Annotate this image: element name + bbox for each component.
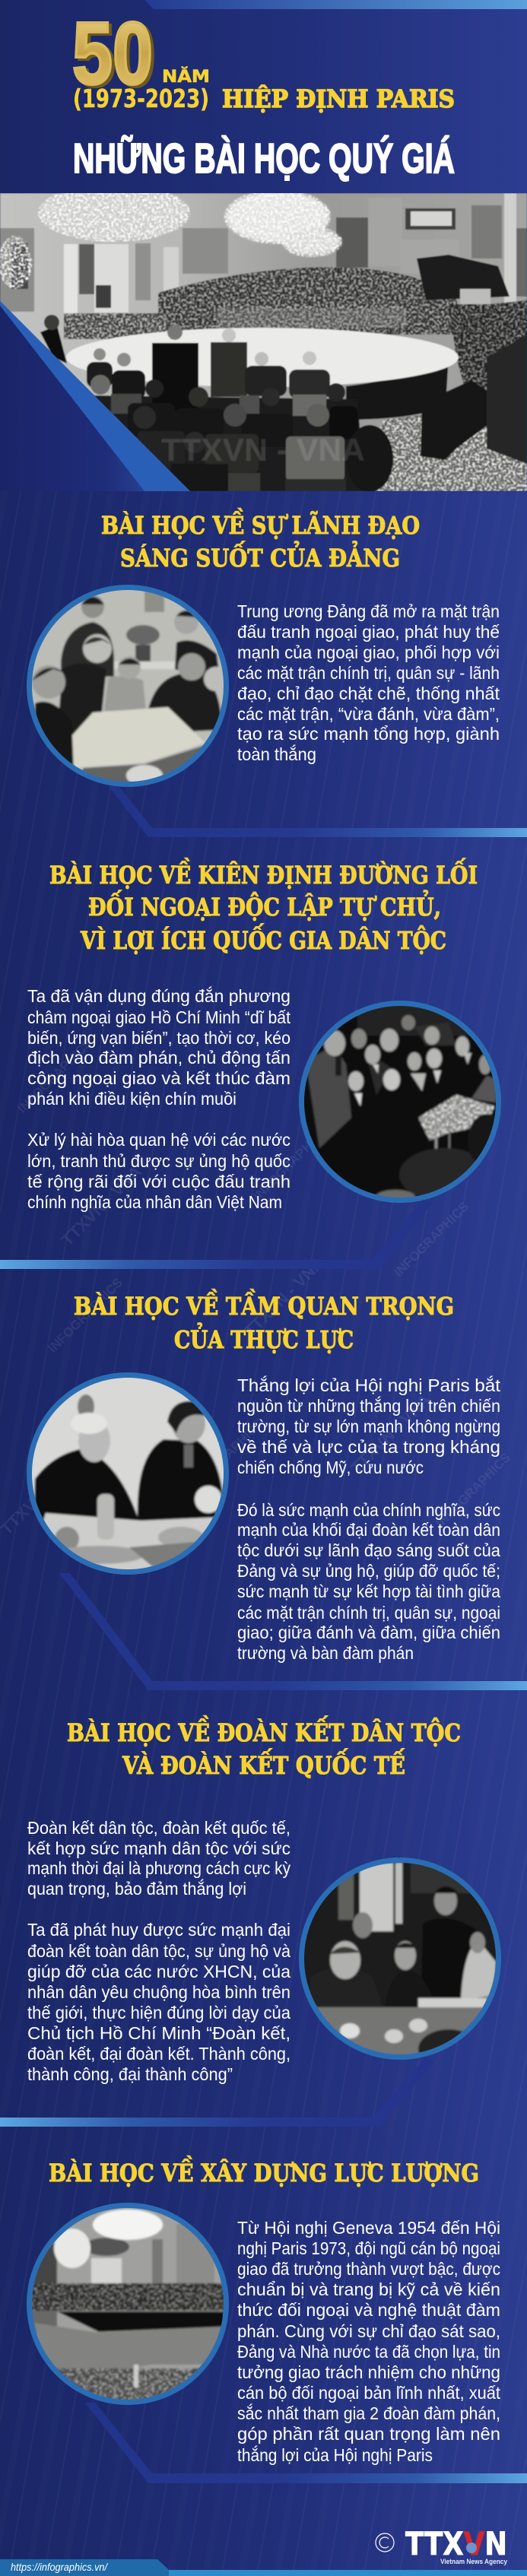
divider <box>0 1200 433 1269</box>
body text: Đoàn kết dân tộc, đoàn kết quốc tế, <box>27 1818 290 1838</box>
heading <box>67 1715 461 1780</box>
body text: các mặt trận, “vừa đánh, vừa đàm”, <box>237 704 500 724</box>
divider <box>0 2059 435 2127</box>
watermarks: TTXVN - VNA <box>58 1162 145 1250</box>
watermarks: TTXVN - VNA <box>240 1253 328 1341</box>
body text: chính nghĩa của nhân dân Việt Nam <box>27 1192 282 1212</box>
body text: Đó là sức mạnh của chính nghĩa, sức <box>237 1500 500 1520</box>
section 1: leadership <box>27 508 527 837</box>
watermarks: TTXVN - VNA <box>347 1390 434 1478</box>
body text <box>237 601 500 764</box>
body text: trường và bàn đàm phán <box>237 1643 414 1663</box>
label nam: NĂM <box>162 67 210 87</box>
url tab <box>0 2559 527 2576</box>
body text: nguồn từ những thắng lợi trên chiến <box>237 1396 500 1416</box>
body text: các mặt trận chính trị, quân sự - lãnh <box>237 663 500 683</box>
body text: Đảng và Nhà nước ta đã chọn lựa, tin <box>237 2342 500 2362</box>
body text <box>237 2218 501 2465</box>
heading <box>101 508 420 573</box>
body text: mạnh thời đại là phương cách cực kỳ <box>27 1858 290 1878</box>
body text: Chủ tịch Hồ Chí Minh “Đoàn kết, <box>27 2023 290 2043</box>
foreground delegates <box>87 325 393 492</box>
body text: phán. Cùng với sự chỉ đạo sát sao, <box>237 2321 500 2341</box>
logo TTXVN: Vietnam News Agency <box>440 2558 508 2566</box>
body text: Ta đã phát huy được sức mạnh đại <box>27 1920 290 1940</box>
body text: góp phần rất quan trọng làm nên <box>237 2424 500 2444</box>
divider <box>85 2403 527 2483</box>
heading: CỦA THỰC LỰC <box>174 1322 354 1354</box>
heading: ĐỐI NGOẠI ĐỘC LẬP TỰ CHỦ, <box>88 890 441 922</box>
crowd <box>64 255 527 426</box>
body text: giúp đỡ của các nước XHCN, của <box>27 1962 290 1981</box>
body text: quan trọng, bảo đảm thắng lợi <box>27 1879 246 1899</box>
body text: tộc dưới sự lãnh đạo sáng suốt của <box>237 1540 500 1560</box>
body text: các mặt trận chính trị, quân sự, ngoại <box>237 1603 500 1623</box>
body text: công ngoại giao và kết thúc đàm <box>27 1068 290 1088</box>
body text: tạo ra sức mạnh tổng hợp, giành <box>237 724 500 744</box>
carpet <box>374 335 527 491</box>
heading <box>74 1289 454 1354</box>
body text: thành công, đại thành công” <box>27 2064 233 2084</box>
body text: thức đối ngoại và nghệ thuật đàm <box>237 2300 500 2320</box>
logo TTXVN: TTXVN <box>405 2525 507 2562</box>
body text: cán bộ đối ngoại bản lĩnh nhất, xuất <box>237 2383 501 2403</box>
body text: thắng lợi của Hội nghị Paris <box>237 2445 433 2465</box>
photo circle <box>27 585 229 791</box>
body text: Trung ương Đảng đã mở ra mặt trận <box>237 601 500 621</box>
body text: mạnh của ngoại giao, phối hợp với <box>237 642 500 662</box>
footer <box>0 2525 527 2576</box>
title Paris: HIỆP ĐỊNH PARIS <box>222 84 455 113</box>
section 3: strength <box>27 1289 527 1690</box>
body text: toàn thắng <box>237 744 316 764</box>
body text <box>27 1818 290 2084</box>
heading: SÁNG SUỐT CỦA ĐẢNG <box>120 541 400 573</box>
photo watermark: TTXVN - VNA <box>161 432 365 468</box>
body text: giao đã trưởng thành vượt bậc, được <box>237 2259 500 2279</box>
body text: địch vào đàm phán, chủ động tấn <box>27 1048 290 1068</box>
section 4: solidarity <box>0 1715 501 2127</box>
url tab: https://infographics.vn/ <box>11 2562 108 2573</box>
heading: BÀI HỌC VỀ TẦM QUAN TRỌNG <box>74 1289 454 1321</box>
body text: Đảng và sự ủng hộ, giúp đỡ quốc tế; <box>237 1561 500 1581</box>
photo circle <box>27 1372 229 1575</box>
chandeliers <box>0 184 342 289</box>
section 5: forces <box>27 2156 527 2483</box>
body text: nghị Paris 1973, đội ngũ cán bộ ngoại <box>237 2238 500 2258</box>
body text: Xử lý hài hòa quan hệ với các nước <box>27 1130 290 1150</box>
watermarks <box>0 1036 513 1539</box>
watermarks: INFOGRAPHICS <box>250 1123 331 1204</box>
watermarks: INFOGRAPHICS <box>391 1199 471 1280</box>
copyright symbol <box>376 2533 394 2552</box>
body text: tưởng giao trách nhiệm cho những <box>237 2362 500 2382</box>
number 50: 50 <box>72 4 153 103</box>
body text <box>237 1375 501 1663</box>
body text: đoàn kết, đại đoàn kết. Thành công, <box>27 2044 290 2064</box>
heading: VÌ LỢI ÍCH QUỐC GIA DÂN TỘC <box>80 923 446 955</box>
body text: tế rộng rãi đối với cuộc đấu tranh <box>27 1172 290 1191</box>
watermarks: INFOGRAPHICS <box>14 1036 95 1116</box>
body text: phán khi điều kiện chín muồi <box>27 1089 237 1109</box>
watermarks: INFOGRAPHICS <box>433 1450 513 1531</box>
number 50: 50 <box>75 6 156 105</box>
body text: trường, từ sự lớn mạnh không ngừng <box>237 1416 500 1436</box>
watermarks: INFOGRAPHICS <box>45 1275 125 1356</box>
body text: Ta đã vận dụng đúng đắn phương <box>27 986 290 1006</box>
watermarks: INFOGRAPHICS <box>186 1416 266 1496</box>
section 2: independence <box>0 858 506 1269</box>
body text: thế giới, thực hiện đúng lời dạy của <box>27 2003 290 2022</box>
heading: BÀI HỌC VỀ SỰ LÃNH ĐẠO <box>101 508 420 540</box>
body text <box>27 986 291 1212</box>
main photo: Paris conference hall <box>0 184 527 492</box>
top accent bar <box>144 0 527 9</box>
body text: Từ Hội nghị Geneva 1954 đến Hội <box>237 2218 500 2238</box>
body text: đấu tranh ngoại giao, phát huy thế <box>237 622 500 642</box>
photo circle <box>299 1001 506 1204</box>
body text: nhân dân yêu chuộng hòa bình trên <box>27 1982 290 2002</box>
body text: mạnh của khối đại đoàn kết toàn dân <box>237 1520 500 1540</box>
heading: VÀ ĐOÀN KẾT QUỐC TẾ <box>122 1748 405 1780</box>
corner triangle with accent <box>0 301 190 491</box>
body text: Thắng lợi của Hội nghị Paris bắt <box>237 1375 501 1395</box>
years: (1973-2023) <box>73 84 209 113</box>
body text: đạo, chỉ đạo chặt chẽ, thống nhất <box>237 684 500 703</box>
photo circle <box>299 1857 501 2069</box>
heading <box>49 858 478 955</box>
body text: biến, ứng vạn biến”, tạo thời cơ, kéo <box>27 1028 290 1048</box>
body text: về thế và lực của ta trong kháng <box>237 1437 500 1457</box>
body text: đoàn kết toàn dân tộc, sự ủng hộ và <box>27 1941 290 1961</box>
body text: chuẩn bị và trang bị kỹ cả về kiến <box>237 2279 500 2299</box>
body text: chiến chống Mỹ, cứu nước <box>237 1458 424 1477</box>
body text: kết hợp sức mạnh dân tộc với sức <box>27 1838 290 1858</box>
body text: châm ngoại giao Hồ Chí Minh “dĩ bất <box>27 1007 291 1027</box>
photo circle <box>27 2203 229 2405</box>
divider <box>109 786 527 837</box>
body text: sức mạnh từ sự kết hợp tài tình giữa <box>237 1581 500 1601</box>
divider <box>59 1573 527 1690</box>
body text: giao; giữa đánh và đàm, giữa chiến <box>237 1623 500 1642</box>
header <box>72 0 527 182</box>
body text: sắc nhất tham gia 2 đoàn đàm phán, <box>237 2403 500 2423</box>
body text: lớn, tranh thủ được sự ủng hộ quốc <box>27 1151 290 1171</box>
round table <box>40 315 459 420</box>
heading: BÀI HỌC VỀ ĐOÀN KẾT DÂN TỘC <box>67 1715 461 1747</box>
